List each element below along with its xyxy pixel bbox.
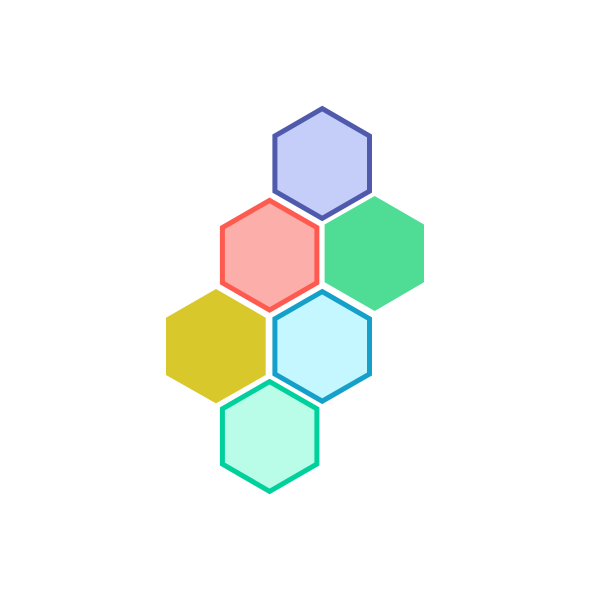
- hexagon: teal outlined: [222, 382, 317, 491]
- hexagon: red outlined: [222, 200, 317, 310]
- hexagon: solid yellow: [166, 289, 266, 403]
- hexagon: solid green: [325, 196, 424, 311]
- hexagon: purple outlined: [275, 109, 370, 218]
- hexagon: blue outlined: [275, 292, 370, 401]
